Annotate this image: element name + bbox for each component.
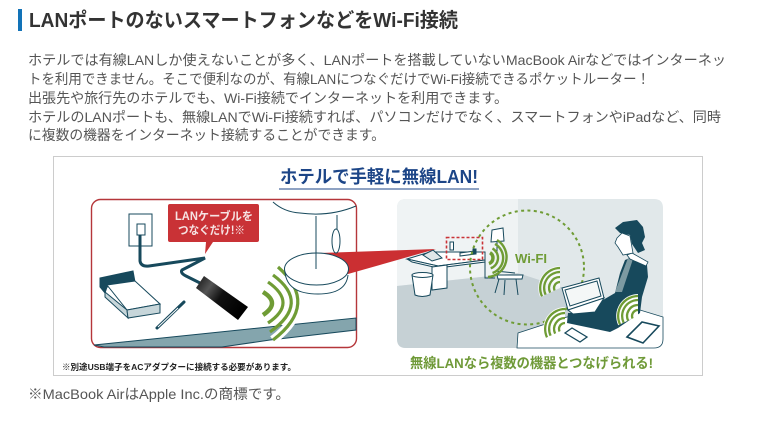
callout — [168, 204, 259, 254]
book device — [100, 271, 160, 318]
floor — [397, 273, 663, 348]
heading: LANポートのないスマートフォンなどをWi-Fi接続 — [29, 9, 458, 32]
lamp and chair — [491, 228, 523, 295]
footnote in image: ※別途USB端子をACアダプターに接続する必要があります。 — [62, 362, 296, 372]
connector wedge — [320, 249, 436, 274]
body text — [28, 52, 726, 143]
desk edge — [94, 318, 356, 347]
person — [567, 220, 648, 332]
trademark note: ※MacBook AirはApple Inc.の商標です。 — [28, 386, 290, 402]
panel: LAN cable setup — [92, 200, 356, 348]
wifi: tablet — [616, 294, 638, 325]
body text: トを利用できません。そこで便利なのが、有線LANにつなぐだけでWi-Fi接続できるポケットルーター！ — [28, 71, 650, 87]
wall socket — [129, 214, 152, 246]
wifi: center — [538, 266, 560, 297]
callout: LANケーブルを — [175, 209, 253, 223]
desk — [407, 242, 495, 290]
LAN cable — [140, 235, 205, 284]
body text: に複数の機器をインターネット接続することができます。 — [28, 127, 385, 143]
callout: つなぐだけ!※ — [178, 224, 245, 237]
laptop — [562, 278, 604, 314]
heading bar — [18, 9, 22, 31]
left wall — [397, 199, 518, 286]
lamp — [273, 202, 356, 294]
green caption: 無線LANなら複数の機器とつなげられる! — [410, 355, 653, 371]
router highlight — [446, 238, 482, 260]
infographic frame — [54, 156, 702, 376]
wifi waves — [263, 267, 298, 340]
infographic title: ホテルで手軽に無線LAN! — [280, 167, 478, 187]
body text: ホテルでは有線LANしか使えないことが多く、LANポートを搭載していないMacBook Airなどではインターネッ — [28, 52, 726, 68]
panel: hotel room — [397, 199, 663, 348]
Wi-Fi range circle — [470, 210, 584, 324]
trash can — [412, 272, 433, 296]
pocket router — [196, 276, 248, 320]
tablet — [627, 322, 659, 343]
desk foreground — [517, 310, 663, 348]
pen — [157, 302, 184, 328]
wifi: phone — [543, 307, 565, 338]
body text: ホテルのLANポートも、無線LANでWi-Fi接続すれば、パソコンだけでなく、スマートフォンやiPadなど、同時 — [28, 109, 721, 125]
body text: 出張先や旅行先のホテルでも、Wi-Fi接続でインターネットを利用できます。 — [28, 90, 508, 106]
Wi-Fi label: Wi-FI — [515, 251, 547, 266]
smartphone — [565, 328, 587, 342]
wifi: router — [488, 240, 507, 277]
